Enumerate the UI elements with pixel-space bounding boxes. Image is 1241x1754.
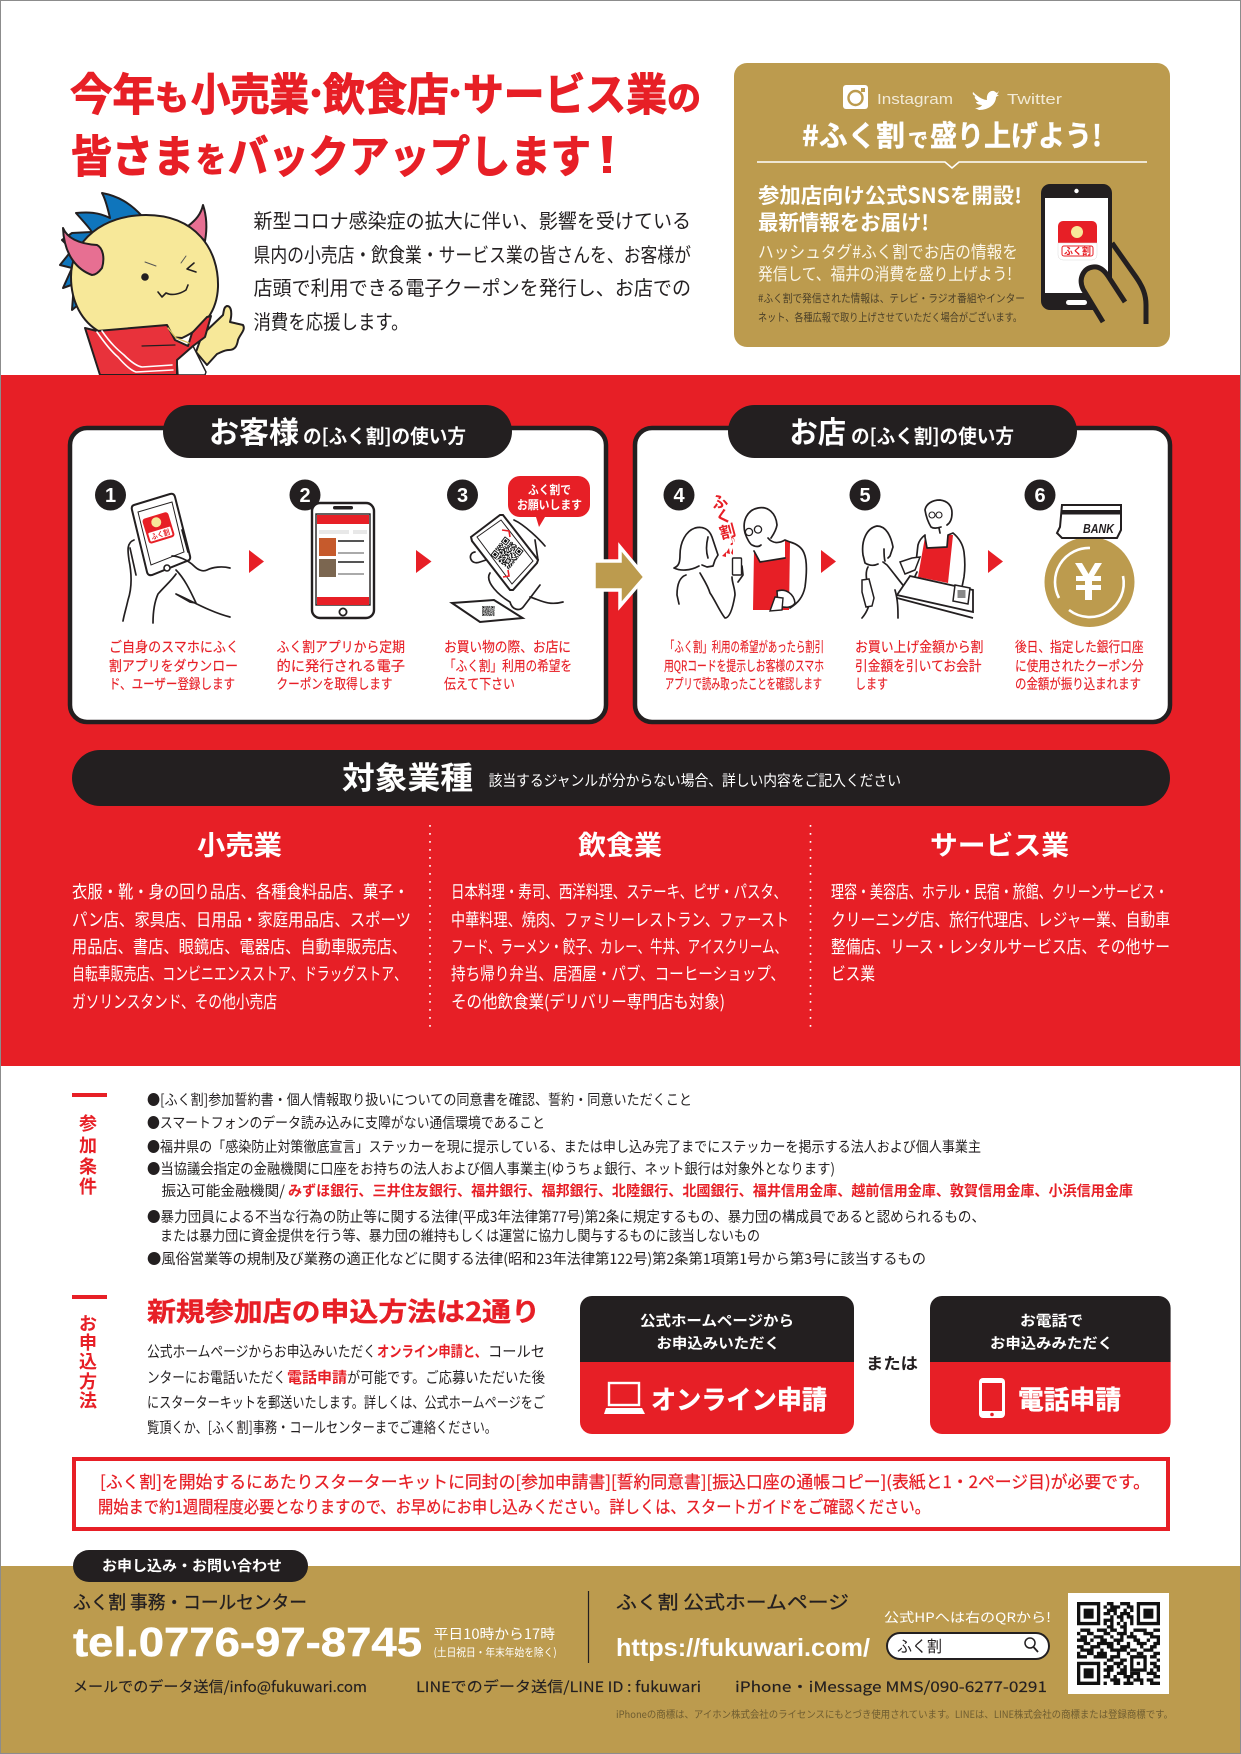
announcement heading: 参加店向け公式SNSを開設! [758,180,1022,210]
column: services: クリーニング店、旅行代理店、レジャー業、自動車 [831,907,1170,932]
column: services [831,824,1170,986]
step 6 number [1024,480,1056,510]
button: phone: お申込みみただく [990,1332,1113,1354]
small note: ネット、各種広報で取り上げさせていただく場合がございます。 [758,309,1022,325]
panel heading [802,113,1102,155]
step 5 number [850,480,880,510]
panel: social media [734,63,1170,347]
column: food and drink: 持ち帰り弁当、居酒屋・パブ、コーヒーショップ、 [451,961,785,986]
step texts: 伝えて下さい [444,674,515,694]
icon: instagram [843,85,868,109]
announcement heading: 最新情報をお届け! [758,207,929,237]
button: phone [930,1296,1171,1434]
application text: オンライン申請と、 [377,1340,487,1362]
section label: application: 込 [79,1348,97,1374]
panel: customer usage [70,405,606,722]
red band [0,375,1241,1066]
speech bubble: ふく割で [528,481,571,498]
panel heading: #ふく割 [802,113,905,155]
step texts: ご自身のスマホにふく [109,637,239,657]
heading pill: contact [73,1550,308,1582]
arrow [249,550,264,573]
panel: shop usage [635,405,1170,722]
conditions list: ●暴力団員による不当な行為の防止等に関する法律(平成3年法律第77号)第2条に規定するもの、暴力団の構成員であると認められるもの、 [147,1206,985,1227]
step texts: お買い物の際、お店に [444,637,571,657]
icon: scanning qr [452,515,563,622]
panel heading: 盛り上げよう! [930,113,1102,155]
section label: application: 法 [79,1387,97,1413]
step texts: お買い上げ金額から割 [855,637,984,657]
divider dots [430,825,810,1032]
qr hint: 公式HPへは右のQRから! [884,1607,1051,1626]
footer band [0,1566,1241,1754]
website label: ふく割 公式ホームページ [616,1589,849,1615]
callout: start notice: 開始まで約1週間程度必要となりますので、お早めにお申し込みください。詳しくは、スタートガイドをご確認ください。 [98,1493,930,1518]
icon: phone in hand [1041,184,1146,324]
icon: customer and clerk [674,487,806,618]
heading pill: shop [728,405,1077,458]
column: food and drink: フード、ラーメン・餃子、カレー、牛丼、アイスクリーム、 [451,934,787,959]
step 3 number: 3 [457,485,468,507]
conditions list: 振込可能金融機関/ [162,1180,285,1201]
section label: application: 申 [79,1329,97,1355]
step texts: します [855,674,888,694]
callout: start notice [74,1459,1168,1529]
heading pill: shop: お店 [790,408,846,452]
column: food and drink: その他飲食業(デリバリー専門店も対象) [451,989,725,1014]
announcement text [758,238,1018,285]
icon: customer and clerk: ふ [708,487,730,514]
section label: conditions: 件 [79,1173,97,1199]
icon: customer and clerk: 割 [716,517,738,544]
step 1 number [95,480,126,510]
small note [758,290,1025,325]
column: services: ビス業 [831,961,875,986]
intro text: 県内の小売店・飲食業・サービス業の皆さんを、お客様が [254,239,691,268]
divider with notch [757,162,1147,168]
step texts: アプリで読み取ったことを確認します [665,674,822,694]
column: food and drink: 日本料理・寿司、西洋料理、ステーキ、ピザ・パスタ、 [451,879,787,904]
section label: application: お [79,1310,97,1336]
contact center label: ふく割 事務・コールセンター [73,1589,307,1615]
column: retail: ガソリンスタンド、その他小売店 [72,989,277,1014]
step texts: クーポンを取得します [276,674,392,694]
heading pill: shop: の[ふく割]の使い方 [851,420,1014,449]
section label: conditions: 加 [79,1132,97,1158]
conditions list: または暴力団に資金提供を行う等、暴力団の維持もしくは運営に協力し関与するものに該当しないもの [160,1225,760,1246]
step texts: 引金額を引いてお会計 [855,656,982,676]
title: を [196,133,226,182]
title: も [155,71,189,120]
step texts: 的に発行される電子 [276,656,405,676]
section label: application: 方 [79,1368,97,1394]
application text: にスターターキットを郵送いたします。詳しくは、公式ホームページをご [147,1392,545,1412]
application text: 公式ホームページからお申込みいただく [147,1340,376,1362]
conditions list: ●スマートフォンのデータ読み込みに支障がない通信環境であること [147,1112,545,1133]
column: services: サービス業 [930,824,1069,863]
icon: phone in hand: ふく割 [1064,244,1091,258]
callout: start notice: [ふく割]を開始するにあたりスターターキットに同封の[参加申請書][誓約同意書][振込口座の通帳コピー](表紙と1・2ページ目)が必要です。 [100,1468,1150,1493]
icon: customer and clerk: ♪ [725,531,739,548]
announcement text: ハッシュタグ#ふく割でお店の情報を [758,238,1018,263]
step 5 number: 5 [859,485,871,507]
section label: application [72,1295,107,1413]
icon: coin and bank card: BANK [1083,521,1115,536]
title: 皆さま [71,121,194,185]
icon: payment at counter [862,500,973,618]
column: retail: パン店、家具店、日用品・家庭用品店、スポーツ [72,907,411,932]
step texts [109,637,572,694]
application heading: 新規参加店の申込方法は2通り [147,1292,540,1329]
intro text [254,205,691,335]
heading pill: customer: の[ふく割]の使い方 [303,420,466,449]
arrow: gold connector [594,547,645,606]
step 2 number: 2 [299,485,311,507]
title: 今年 [70,59,155,123]
column: food and drink: 飲食業 [578,824,662,863]
opening hours: (土日祝日・年末年始を除く) [434,1644,557,1660]
intro text: 新型コロナ感染症の拡大に伴い、影響を受けている [254,205,691,234]
small note: #ふく割で発信された情報は、テレビ・ラジオ番組やインター [758,290,1025,306]
instagram label: Instagram [877,91,953,108]
search box: ふく割 [897,1633,942,1657]
opening hours: 平日10時から17時 [434,1624,555,1644]
application text: が可能です。ご応募いただいた後 [347,1366,545,1388]
conditions list [147,1089,1133,1269]
opening hours [434,1624,557,1660]
application text: コールセ [488,1340,545,1362]
step 3 number [447,480,478,510]
icon: phone with app [312,503,374,618]
icon: laptop [604,1383,645,1414]
button: phone: お電話で [1020,1310,1083,1331]
trademark note: iPhoneの商標は、アイホン株式会社のライセンスにもとづき使用されています。LINEは、LINE株式会社の商標または登録商標です。 [616,1706,1173,1721]
arrow [416,550,432,573]
step texts: 「ふく割」利用の希望があったら割引 [665,637,824,657]
announcement text: 発信して、福井の消費を盛り上げよう! [758,260,1012,285]
or label: または [866,1350,918,1374]
heading pill: customer: お客様 [209,408,299,452]
icon: mascot [60,193,244,375]
step texts: ふく割アプリから定期 [276,637,405,657]
step texts: に使用されたクーポン分 [1015,656,1144,676]
step texts: ド、ユーザー登録します [109,674,235,694]
announcement heading [758,180,1022,237]
column: food and drink: 中華料理、焼肉、ファミリーレストラン、ファースト [451,907,789,932]
submission contacts: iPhone・iMessage MMS/090-6277-0291 [735,1676,1047,1697]
section label: conditions: 参 [79,1110,97,1136]
submission contacts: メールでのデータ送信/info@fukuwari.com [73,1676,367,1697]
step texts: の金額が振り込まれます [1015,674,1141,694]
phone number: tel.0776-97-8745 [73,1619,422,1665]
icon: customer and clerk: く [712,502,734,529]
title [70,59,701,185]
qr code [1068,1593,1169,1694]
icon: coin and bank card [1044,505,1134,627]
icon: smartphone [979,1378,1005,1418]
arrow [821,550,836,573]
search box [887,1633,1049,1659]
step 6 number: 6 [1034,485,1046,507]
step texts: 後日、指定した銀行口座 [1015,637,1144,657]
application text [147,1340,545,1438]
step texts: 用QRコードを提示しお客様のスマホ [664,656,824,676]
conditions list: みずほ銀行、三井住友銀行、福井銀行、福邦銀行、北陸銀行、北國銀行、福井信用金庫、越前信用金庫、敦賀信用金庫、小浜信用金庫 [288,1180,1133,1201]
column: retail [72,824,411,1014]
heading pill: target industries [72,750,1170,806]
intro text: 消費を応援します。 [254,306,408,335]
column: food and drink [451,824,789,1014]
heading pill: target industries: 該当するジャンルが分からない場合、詳しい内容をご記入ください [489,770,901,790]
title: 小売業 [191,59,309,123]
column: retail: 用品店、書店、眼鏡店、電器店、自動車販売店、 [72,934,407,959]
button: online: お申込みいただく [656,1332,780,1354]
button: online: 公式ホームページから [640,1310,794,1331]
speech bubble [508,476,590,527]
title: の [667,71,701,120]
icon: twitter bird [973,91,999,110]
panel heading: で [908,124,928,153]
title: サービス業 [463,59,667,123]
conditions list: ●風俗営業等の規制及び業務の適正化などに関する法律(昭和23年法律第122号)第2条第1項第1号から第3号に該当するもの [147,1248,926,1269]
application text: 覧頂くか、[ふく割]事務・コールセンターまでご連絡ください。 [147,1416,497,1438]
step 2 number [290,480,320,510]
vertical divider [588,1591,590,1663]
icon: hand holding phone: ふく割 [150,526,172,543]
intro text: 店頭で利用できる電子クーポンを発行し、お店での [254,272,691,301]
heading pill: target industries: 対象業種 [342,753,473,798]
column: retail: 衣服・靴・身の回り品店、各種食料品店、菓子・ [72,879,409,904]
button: phone: 電話申請 [1018,1380,1121,1417]
section label: conditions [72,1093,107,1199]
heading pill: customer [163,405,512,458]
title: 飲食店 [323,59,449,123]
conditions list: ●[ふく割]参加誓約書・個人情報取り扱いについての同意書を確認、誓約・同意いただくこと [147,1089,692,1110]
title: バックアップします [228,121,591,185]
column: retail: 小売業 [197,824,282,863]
button: online: オンライン申請 [651,1380,827,1417]
step texts: 「ふく割」利用の希望を [444,656,572,676]
submission contacts [73,1676,1047,1697]
button: online [580,1296,854,1434]
conditions list: ●当協議会指定の金融機関に口座をお持ちの法人および個人事業主(ゆうちょ銀行、ネット銀行は対象外となります) [147,1158,835,1179]
column: services: 整備店、リース・レンタルサービス店、その他サー [831,934,1170,959]
application text: 電話申請 [287,1366,347,1388]
column: retail: 自転車販売店、コンビニエンスストア、ドラッグストア、 [72,961,407,986]
application text: ンターにお電話いただく [147,1366,286,1388]
step 4 number: 4 [673,485,685,507]
arrow [988,550,1003,573]
step texts [664,637,1144,694]
step 4 number [664,480,694,510]
website url: https://fukuwari.com/ [616,1634,870,1662]
step 1 number: 1 [105,485,116,507]
twitter label: Twitter [1007,91,1062,108]
step texts: 割アプリをダウンロー [109,656,238,676]
conditions list: ●福井県の「感染防止対策徹底宣言」ステッカーを現に提示している、または申し込み完了までにステッカーを掲示する法人および個人事業主 [147,1136,981,1157]
speech bubble: お願いします [517,496,582,513]
submission contacts: LINEでのデータ送信/LINE ID : fukuwari [416,1676,701,1697]
heading pill: contact: お申し込み・お問い合わせ [102,1555,282,1576]
icon: hand holding phone [123,494,230,623]
section label: conditions: 条 [79,1153,97,1179]
